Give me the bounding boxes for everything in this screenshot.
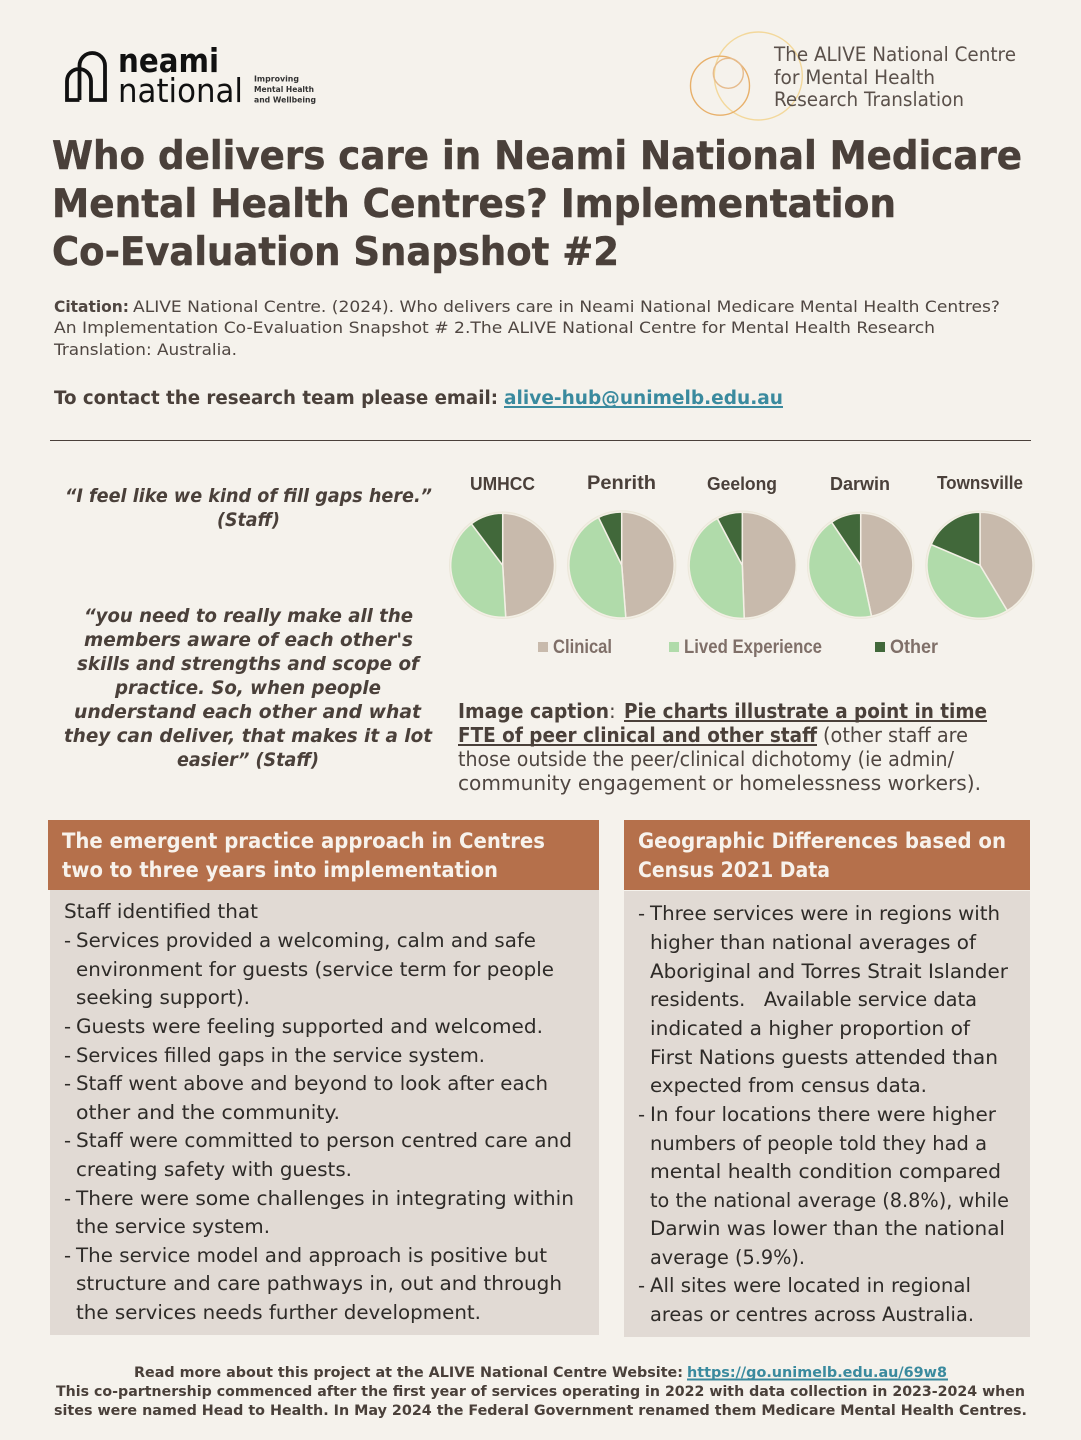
title: Co-Evaluation Snapshot #2 bbox=[52, 230, 619, 275]
footer note: This co-partnership commenced after the first year of services operating in 2022 with data collection in 2023-2024 when bbox=[56, 1384, 1025, 1400]
panel text: staff findings: - bbox=[64, 1129, 71, 1152]
logo: Neami National bbox=[67, 41, 316, 110]
panel: emergent practice approach bbox=[48, 820, 599, 1335]
wordmark: neami national: neami bbox=[118, 41, 219, 80]
footer note: https://go.unimelb.edu.au/69w8 bbox=[687, 1365, 947, 1381]
wordmark: ALIVE National Centre: for Mental Health bbox=[774, 66, 935, 89]
panel text: staff findings: Staff went above and beyond to look after each bbox=[76, 1072, 548, 1095]
pie: Penrith: Penrith bbox=[587, 473, 656, 494]
icon: overlapping circles bbox=[690, 32, 802, 120]
quote: scope of practice bbox=[64, 605, 433, 771]
tagline: Improving Mental Health and Wellbeing: Improving bbox=[254, 74, 299, 84]
panel text: census findings: Darwin was lower than the national bbox=[650, 1217, 1005, 1240]
citation: ALIVE National Centre. (2024). Who delivers care in Neami National Medicare Mental Health Centres? bbox=[133, 297, 1000, 316]
legend: Lived Experience bbox=[684, 637, 822, 658]
panel heading: two to three years into implementation bbox=[62, 858, 498, 882]
pie: Townsville: Townsville bbox=[937, 473, 1023, 493]
panel text: staff findings: Staff identified that bbox=[64, 900, 258, 923]
panel heading: Geographic Differences based on bbox=[638, 829, 1006, 853]
pie charts bbox=[450, 473, 1034, 619]
image caption: those outside the peer/clinical dichotomy (ie admin/ bbox=[458, 747, 954, 771]
title bbox=[52, 134, 1022, 275]
panel text: staff findings bbox=[64, 900, 574, 1324]
citation: Translation: Australia. bbox=[53, 340, 237, 359]
wordmark: neami national: national bbox=[118, 71, 243, 110]
panel text: census findings: expected from census data. bbox=[650, 1074, 927, 1097]
footer note: Read more about this project at the ALIVE National Centre Website: bbox=[134, 1365, 683, 1381]
panel text: staff findings: Services provided a welcoming, calm and safe bbox=[76, 929, 536, 952]
panel text: census findings: First Nations guests attended than bbox=[650, 1046, 998, 1069]
legend: Clinical bbox=[553, 637, 612, 658]
panel text: staff findings: The service model and approach is positive but bbox=[75, 1244, 547, 1267]
contact line: alive-hub@unimelb.edu.au bbox=[504, 388, 783, 409]
panel text: census findings: residents. Available service data bbox=[650, 988, 977, 1011]
image caption: Image caption bbox=[458, 699, 609, 723]
footer note bbox=[54, 1365, 1027, 1419]
image caption: (other staff are bbox=[823, 723, 968, 747]
panel heading bbox=[624, 820, 1030, 890]
tagline: Improving Mental Health and Wellbeing bbox=[254, 74, 316, 104]
panel text: census findings: indicated a higher proportion of bbox=[650, 1017, 971, 1040]
panel text: staff findings: seeking support). bbox=[76, 986, 250, 1009]
tagline: Improving Mental Health and Wellbeing: and Wellbeing bbox=[254, 96, 316, 104]
pie: Geelong bbox=[688, 474, 796, 619]
panel text: staff findings: - bbox=[64, 1044, 71, 1067]
panel text: staff findings: - bbox=[64, 1072, 71, 1095]
panel text: staff findings: structure and care pathways in, out and through bbox=[76, 1272, 562, 1295]
panel text: staff findings: environment for guests (service term for people bbox=[76, 958, 554, 981]
image caption: Pie charts illustrate a point in time bbox=[624, 699, 987, 723]
panel text: staff findings: the service system. bbox=[76, 1215, 270, 1238]
panel text: staff findings: - bbox=[64, 929, 71, 952]
panel text: staff findings: other and the community. bbox=[76, 1101, 340, 1124]
quote: scope of practice: members aware of each other's bbox=[84, 629, 413, 651]
panel text: census findings: - bbox=[638, 1103, 645, 1126]
citation: An Implementation Co-Evaluation Snapshot # 2.The ALIVE National Centre for Mental Health Research bbox=[54, 318, 935, 337]
quote: fill gaps: (Staff) bbox=[217, 509, 280, 531]
quote: scope of practice: “you need to really make all the bbox=[84, 605, 413, 627]
pie: Geelong: Geelong bbox=[707, 474, 777, 494]
panel text: staff findings: the services needs further development. bbox=[76, 1301, 481, 1324]
panel text: staff findings: - bbox=[64, 1244, 71, 1267]
panel text: staff findings: There were some challenges in integrating within bbox=[75, 1187, 574, 1210]
panel text: census findings: average (5.9%). bbox=[650, 1246, 805, 1269]
panel: geographic differences bbox=[624, 820, 1030, 1337]
legend bbox=[538, 637, 939, 658]
icon: Neami arches bbox=[67, 53, 105, 100]
panel text: census findings: - bbox=[638, 902, 645, 925]
panel text: census findings: to the national average (8.8%), while bbox=[650, 1189, 1009, 1212]
legend: Other bbox=[890, 637, 939, 658]
wordmark: neami national bbox=[118, 41, 243, 110]
image caption bbox=[458, 699, 987, 795]
panel text: staff findings: Services filled gaps in the service system. bbox=[76, 1044, 485, 1067]
contact line: To contact the research team please email: bbox=[54, 388, 498, 409]
panel text: staff findings: Guests were feeling supported and welcomed. bbox=[76, 1015, 543, 1038]
quote: scope of practice: practice. So, when people bbox=[114, 677, 381, 699]
panel text: staff findings: Staff were committed to person centred care and bbox=[76, 1129, 572, 1152]
quote: scope of practice: easier” (Staff) bbox=[177, 749, 319, 771]
panel text: census findings: - bbox=[638, 1274, 645, 1297]
image caption: community engagement or homelessness workers). bbox=[458, 771, 981, 795]
wordmark: ALIVE National Centre: Research Translation bbox=[774, 88, 964, 111]
panel text: census findings: All sites were located in regional bbox=[650, 1274, 971, 1297]
panel text: staff findings: - bbox=[64, 1187, 71, 1210]
panel text: staff findings: creating safety with guests. bbox=[76, 1158, 352, 1181]
panel text: census findings: mental health condition compared bbox=[650, 1160, 1001, 1183]
citation: Citation: bbox=[54, 297, 129, 316]
pie: Darwin: Darwin bbox=[830, 474, 890, 494]
panel background bbox=[50, 890, 599, 1335]
quote: scope of practice: understand each other and what bbox=[74, 701, 422, 723]
tagline: Improving Mental Health and Wellbeing: Mental Health bbox=[254, 85, 314, 94]
title: Who delivers care in Neami National Medicare bbox=[52, 134, 1022, 179]
image caption: FTE of peer clinical and other staff bbox=[458, 723, 818, 747]
pie: Darwin bbox=[808, 474, 914, 618]
panel background bbox=[624, 891, 1030, 1337]
quote: fill gaps bbox=[65, 485, 432, 531]
image caption: : bbox=[609, 699, 616, 723]
wordmark: ALIVE National Centre: The ALIVE National Centre bbox=[773, 43, 1016, 66]
panel heading: The emergent practice approach in Centres bbox=[62, 829, 545, 853]
pie: UMHCC bbox=[450, 474, 556, 618]
panel text: census findings: Aboriginal and Torres Strait Islander bbox=[650, 960, 1009, 983]
contact line bbox=[54, 388, 783, 409]
panel text: census findings: In four locations there were higher bbox=[650, 1103, 997, 1126]
panel text: staff findings: - bbox=[64, 1015, 71, 1038]
panel text: census findings bbox=[638, 902, 1009, 1326]
quote: scope of practice: skills and strengths and scope of bbox=[77, 653, 422, 675]
quote: fill gaps: “I feel like we kind of fill gaps here.” bbox=[65, 485, 432, 507]
panel heading bbox=[48, 820, 599, 890]
quote: scope of practice: they can deliver, that makes it a lot bbox=[64, 725, 433, 747]
logo: ALIVE National Centre bbox=[690, 32, 1016, 120]
panel text: census findings: higher than national averages of bbox=[650, 931, 977, 954]
pie: Townsville bbox=[926, 473, 1034, 619]
title: Mental Health Centres? Implementation bbox=[52, 182, 896, 227]
footer note: sites were named Head to Health. In May 2024 the Federal Government renamed them Medicare Mental Health Centres. bbox=[54, 1403, 1027, 1419]
wordmark: ALIVE National Centre bbox=[773, 43, 1016, 111]
pie: Penrith bbox=[568, 473, 676, 619]
panel text: census findings: numbers of people told they had a bbox=[650, 1132, 987, 1155]
panel heading: Census 2021 Data bbox=[638, 858, 830, 882]
panel text: census findings: areas or centres across Australia. bbox=[650, 1303, 974, 1326]
panel text: census findings: Three services were in regions with bbox=[649, 902, 1000, 925]
citation bbox=[53, 297, 1000, 359]
pie: UMHCC: UMHCC bbox=[470, 474, 535, 494]
